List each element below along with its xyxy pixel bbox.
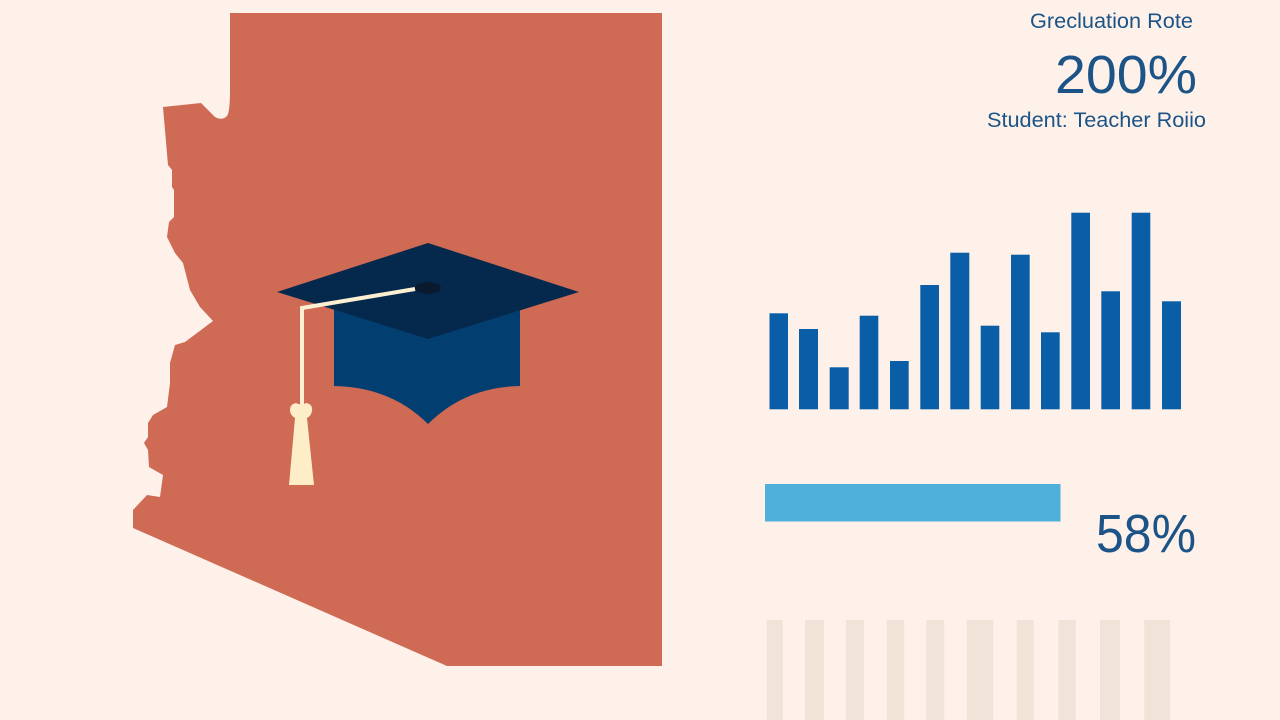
cap button bbox=[415, 282, 441, 294]
stat: 200 percent: 200% bbox=[1055, 45, 1197, 105]
tassel bbox=[289, 403, 314, 485]
faded bar row bbox=[767, 620, 1170, 720]
cap board bbox=[277, 243, 579, 339]
map: Arizona silhouette bbox=[133, 13, 662, 666]
cap base bbox=[334, 300, 520, 424]
stat: 58 percent: 58% bbox=[1096, 504, 1196, 564]
icon: graduation cap bbox=[277, 243, 579, 485]
bar chart bbox=[770, 213, 1181, 409]
heading: graduation rate label: Grecluation Rote bbox=[1030, 10, 1193, 33]
heading: student teacher ratio label: Student: Teacher Roiio bbox=[987, 109, 1206, 132]
tassel cord bbox=[302, 289, 415, 405]
progress bar bbox=[765, 484, 1060, 522]
